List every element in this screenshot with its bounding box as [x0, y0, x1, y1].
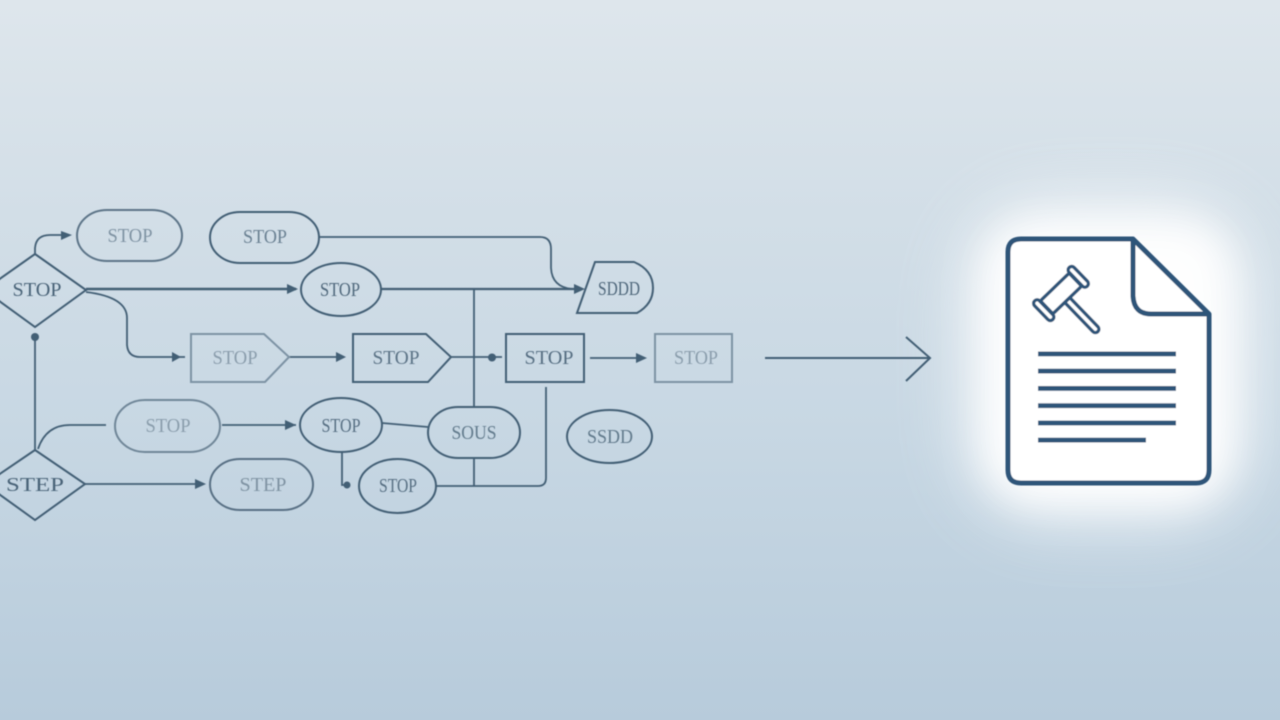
arrowheads [31, 231, 647, 489]
node: oval right: SSDD [587, 426, 633, 448]
node: oval centre [300, 398, 382, 452]
node: top stadium two [210, 212, 319, 263]
connectors [35, 235, 645, 486]
node: top stadium two: STOP [243, 226, 287, 248]
node: oval bottom [359, 459, 436, 513]
node: oval bottom: STOP [379, 475, 417, 497]
node: oval upper [301, 263, 381, 316]
node: stadium light middle: STOP [146, 415, 190, 437]
node: rectangle light [655, 334, 732, 382]
node: pentagon dark [353, 334, 451, 382]
node: stadium centre right: SOUS [452, 422, 496, 444]
node: terminal shape: SDDD [598, 278, 640, 300]
node: oval upper: STOP [320, 279, 360, 301]
node: stadium light middle [115, 400, 220, 452]
node: terminal shape [577, 262, 653, 313]
node: stadium bottom: STEP [240, 474, 286, 496]
node: top stadium one [77, 210, 182, 261]
node: stadium centre right [428, 407, 520, 458]
node: rectangle dark: STOP [524, 347, 574, 369]
flowchart [0, 210, 732, 520]
node: rectangle light: STOP [674, 347, 718, 369]
arrow: flowchart to document [765, 337, 930, 381]
node: decision bottom [0, 450, 85, 520]
node: pentagon light: STOP [212, 347, 258, 369]
document outline [1008, 239, 1209, 483]
glow behind document [965, 205, 1250, 520]
folded corner [1133, 239, 1209, 314]
node: top stadium one: STOP [108, 225, 152, 247]
node: rectangle dark [506, 334, 584, 382]
node: oval centre: STOP [322, 415, 360, 437]
node: decision top: STOP [12, 279, 62, 301]
gavel [1032, 265, 1118, 351]
text lines [1038, 352, 1176, 442]
node: pentagon light [191, 334, 289, 382]
node: oval right [567, 410, 652, 463]
node: decision bottom: STEP [6, 474, 64, 496]
node: pentagon dark: STOP [372, 347, 420, 369]
icon: legal document [1008, 239, 1209, 483]
node: decision top [0, 254, 86, 327]
node: stadium bottom [210, 459, 313, 510]
